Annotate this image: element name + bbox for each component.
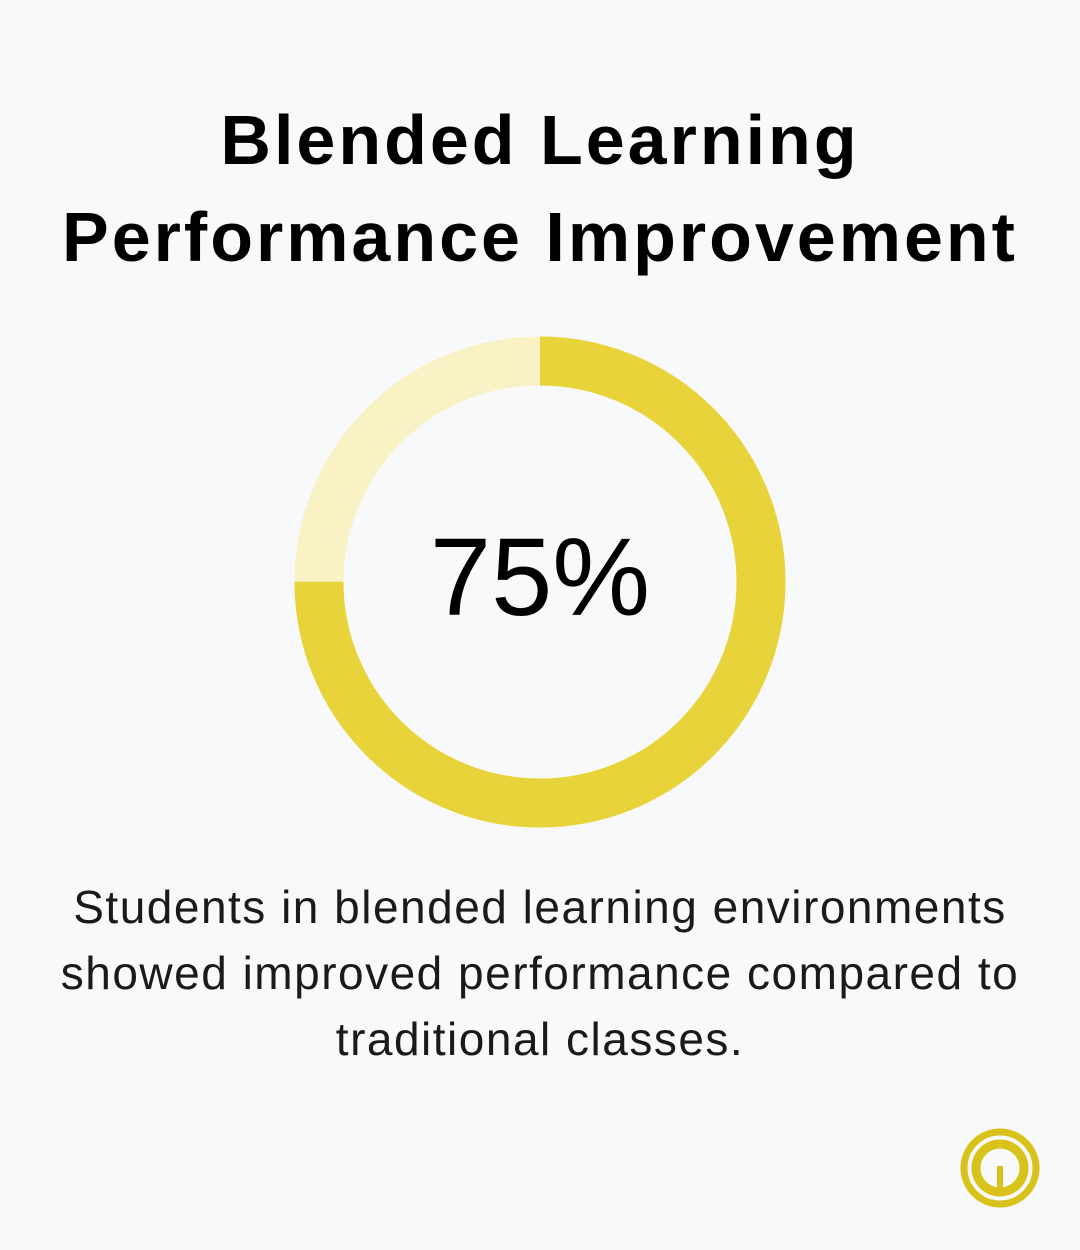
description text [61, 881, 1019, 1065]
donut chart: 75% [430, 516, 650, 639]
title: Blended Learning [220, 101, 860, 179]
description text: traditional classes. [336, 1013, 744, 1065]
description text: Students in blended learning environments [73, 881, 1007, 933]
icon: logo [960, 1128, 1040, 1208]
title [62, 101, 1018, 276]
title: Performance Improvement [62, 198, 1018, 276]
description text: showed improved performance compared to [61, 947, 1019, 999]
